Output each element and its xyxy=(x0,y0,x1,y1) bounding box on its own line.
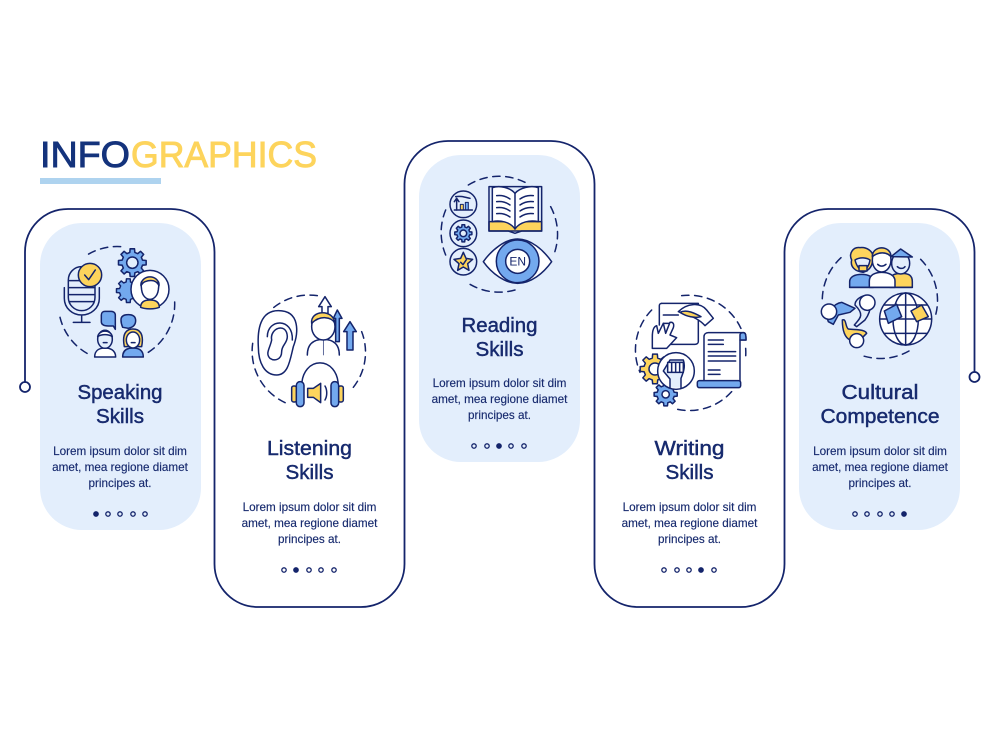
heading: Cultural xyxy=(842,382,918,404)
body text: principes at. xyxy=(278,533,341,546)
body text: Lorem ipsum dolor sit dim xyxy=(53,445,187,458)
heading line 2: Competence xyxy=(820,406,940,428)
heading line 2: Skills xyxy=(666,462,714,484)
icon: reading xyxy=(441,176,558,292)
heading: Speaking xyxy=(78,382,162,404)
title xyxy=(40,134,317,175)
heading line 2: Skills xyxy=(96,406,144,428)
pagination dots xyxy=(662,568,716,572)
panel: speaking skills xyxy=(40,223,201,530)
body text: principes at. xyxy=(848,477,912,490)
body text: amet, mea regione diamet xyxy=(52,461,189,474)
pagination dots xyxy=(472,444,526,448)
body text: amet, mea regione diamet xyxy=(432,393,568,406)
panel: writing skills xyxy=(622,295,758,572)
heading: Writing xyxy=(654,438,724,460)
title: GRAPHICS xyxy=(131,134,317,175)
body text: principes at. xyxy=(88,477,152,490)
heading: Listening xyxy=(267,438,352,460)
connecting outline xyxy=(20,141,980,607)
panel: listening skills xyxy=(242,295,378,572)
pagination dots xyxy=(282,568,336,572)
heading line 2: Skills xyxy=(476,339,524,361)
icon: reading: EN xyxy=(509,255,526,269)
title: INFO xyxy=(40,134,130,175)
body text: amet, mea regione diamet xyxy=(242,517,378,530)
body text: Lorem ipsum dolor sit dim xyxy=(623,501,756,514)
body text: principes at. xyxy=(468,409,531,422)
body text: amet, mea regione diamet xyxy=(622,517,758,530)
body text: Lorem ipsum dolor sit dim xyxy=(813,445,947,458)
icon: cultural competence xyxy=(821,248,938,359)
icon: writing xyxy=(635,295,746,411)
body text: amet, mea regione diamet xyxy=(812,461,949,474)
pagination dots xyxy=(853,512,906,516)
heading line 2: Skills xyxy=(286,462,334,484)
title underline xyxy=(40,178,161,184)
body text: Lorem ipsum dolor sit dim xyxy=(243,501,376,514)
pagination dots xyxy=(94,512,147,516)
panel: cultural competence xyxy=(799,223,960,530)
body text: principes at. xyxy=(658,533,721,546)
heading: Reading xyxy=(462,315,538,337)
icon: speaking xyxy=(60,247,175,357)
panel: reading skills xyxy=(419,155,580,462)
body text: Lorem ipsum dolor sit dim xyxy=(433,377,566,390)
icon: listening xyxy=(252,295,366,407)
